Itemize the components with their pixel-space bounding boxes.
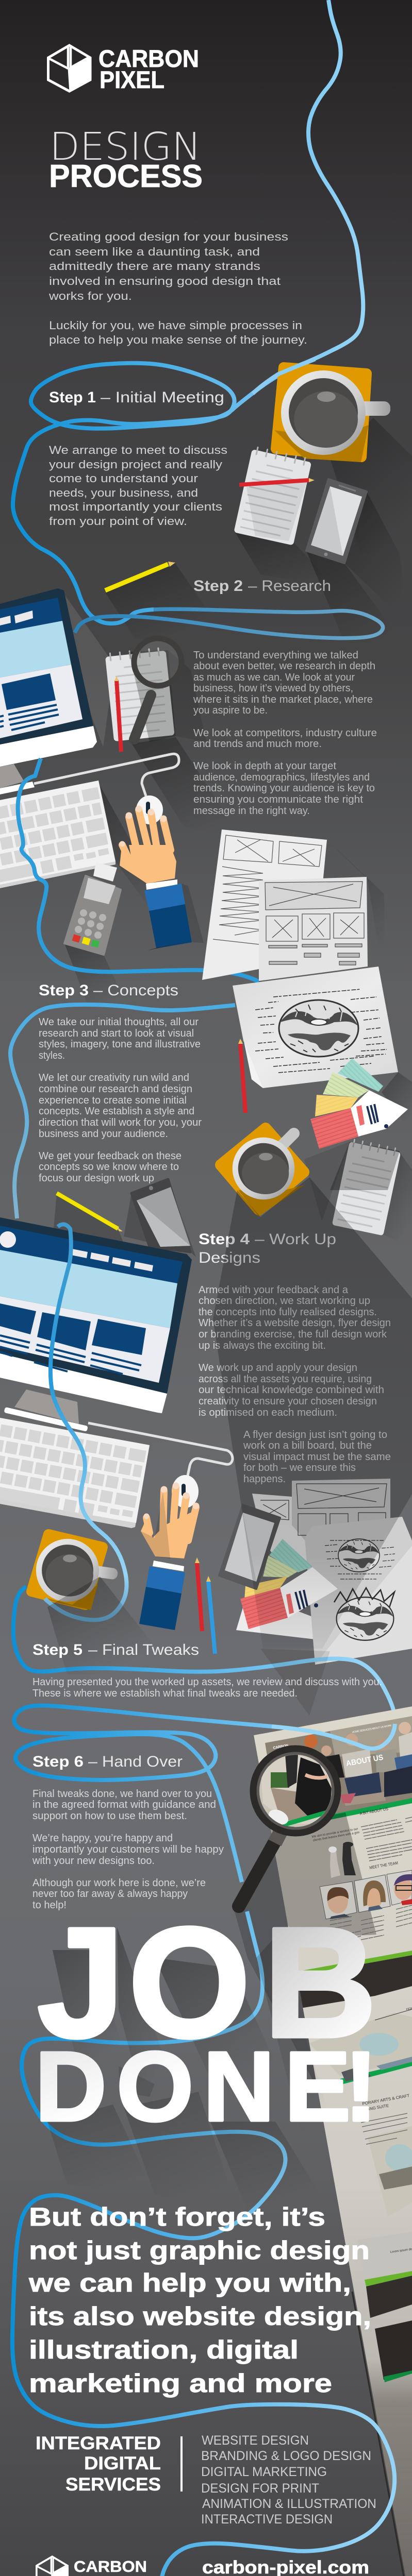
icon: wireframe sketch paper 2: [259, 877, 368, 981]
page edge shadow: [352, 2292, 407, 2576]
Step 6 heading: – Hand Over: [88, 1753, 183, 1770]
closing statement: marketing and more: [29, 2369, 332, 2398]
Step 2 text: business, how it’s viewed by others,: [193, 683, 353, 694]
Step 3 text: [39, 1016, 202, 1184]
icon: red pencil 2: [238, 1039, 245, 1113]
long shadows: first desk section: [52, 418, 412, 1257]
Step 4 text: work on a bill board, but the: [243, 1440, 372, 1451]
Step 1 heading: – Initial Meeting: [101, 389, 224, 406]
Step 2 text: you aspire to be.: [193, 705, 268, 716]
Step 5 text: These is where we establish what final tweaks are needed.: [32, 1688, 298, 1699]
Step 6 text: to help!: [32, 1900, 67, 1911]
services list: DESIGN FOR PRINT: [201, 2481, 319, 2496]
dog illustrations: [328, 1842, 356, 1878]
ribbon: down from magnifier, JOB and DONE loops to the footer: [12, 1911, 394, 2576]
title: [49, 125, 203, 194]
Step 3 heading: Step 3: [39, 982, 89, 999]
intro text: admittedly there are many strands: [49, 260, 260, 273]
Step 6 text: with your new designs too.: [32, 1855, 155, 1867]
icon: keyboard 2: [0, 1418, 150, 1528]
ribbon: through keyboard to paper: [18, 758, 259, 981]
intro text: works for you.: [48, 290, 132, 302]
Step 2 text: We look in depth at your target: [193, 760, 336, 772]
Step 1 text: most importantly your clients: [49, 500, 222, 513]
Step 1 heading: Step 1: [49, 389, 96, 406]
ribbon overlay on mockup: [272, 1724, 395, 1749]
about text lines: [330, 1817, 412, 1947]
icon: wireframe sketch paper 1: [202, 829, 327, 980]
icon: hand on mouse 2: [139, 1475, 199, 1630]
icon: keyboard 1: [0, 781, 116, 890]
Step 4 heading: – Work Up: [255, 1231, 336, 1248]
integrated digital services heading: INTEGRATED: [36, 2433, 161, 2453]
Step 4 text: up is always the exciting bit.: [199, 1340, 326, 1351]
shadow band below coaster 3: [47, 1577, 155, 1674]
Step 6 text: We’re happy, you’re happy and: [32, 1833, 173, 1844]
Step 3 text: direction that will work for you, your: [39, 1117, 202, 1128]
title: DESIGN: [50, 125, 201, 169]
integrated digital services heading: SERVICES: [65, 2475, 161, 2495]
Step 3 text: experience to create some initial: [39, 1095, 187, 1106]
shadow under website mockup: [234, 1845, 330, 2112]
closing statement: [28, 2202, 371, 2398]
intro text: [48, 230, 307, 346]
logo: Carbon Pixel: [48, 45, 199, 93]
intro text: can seem like a daunting task, and: [49, 245, 260, 258]
icon: coaster and coffee cup 2: [221, 1128, 304, 1216]
shaded content column: [270, 1812, 376, 1936]
icon: notepad 3: [330, 1139, 402, 1235]
vertical divider: [180, 2436, 183, 2492]
Step 2 text: about even better, we research in depth: [193, 660, 375, 672]
Step 4 text: [199, 1284, 391, 1485]
hero photo of the team: [265, 1716, 412, 1825]
Step 3 heading: – Concepts: [93, 982, 178, 999]
Step 4 text: is optimised on each medium.: [199, 1407, 337, 1418]
icon: notepad with magnifier and red pencil: [105, 638, 182, 752]
Step 3 text: concepts. We establish a style and: [39, 1106, 194, 1117]
Step 4 text: chosen direction, we start working up: [199, 1295, 370, 1307]
DONE headline: DONE!: [35, 2031, 377, 2142]
Step 3 text: styles.: [39, 1050, 65, 1061]
letter shadows for JOB DONE: [47, 1927, 330, 2210]
icon: hand on mouse 1: [120, 795, 201, 951]
integrated digital services heading: [36, 2433, 161, 2495]
ribbon: Step 5 and Step 6 loops: [13, 1587, 395, 1882]
services list: [201, 2433, 376, 2527]
Step 5 heading: – Final Tweaks: [88, 1641, 199, 1658]
icon: yellow pencil 1: [105, 562, 175, 590]
Step 2 text: as much as we can. We look at your: [193, 672, 355, 683]
Step 6 text: Final tweaks done, we hand over to you: [32, 1788, 212, 1800]
about text: We aim to provide a service to our: [311, 1827, 358, 1839]
Step 2 text: We look at competitors, industry culture: [193, 727, 377, 739]
closing statement: not just graphic design: [29, 2236, 370, 2265]
Step 2 text: and trends and much more.: [193, 738, 322, 750]
Step 4 text: visual impact must be the same: [243, 1451, 391, 1463]
footer logo: [37, 2556, 147, 2576]
Step 3 text: combine our research and design: [39, 1083, 192, 1095]
icon: coaster and coffee cup 3: [31, 1534, 119, 1610]
closing statement: illustration, digital: [29, 2335, 299, 2364]
ribbon over coaster: [253, 359, 315, 394]
Step 4 heading: Step 4: [199, 1231, 250, 1248]
icon: red and blue pencils: [195, 1557, 215, 1654]
Step 4 text: Armed with your feedback and a: [199, 1284, 349, 1296]
Step 3 text: concepts so we know where to: [39, 1161, 179, 1173]
title: PROCESS: [49, 159, 203, 194]
icon: phone 2: [131, 1179, 190, 1252]
Step 1 text: come to understand your: [49, 472, 199, 485]
Step 6 text: Although our work here is done, we’re: [32, 1877, 206, 1889]
about text: [311, 1806, 399, 1870]
JOB headline: JOB: [37, 1895, 377, 2070]
Step 2 heading: – Research: [248, 578, 331, 595]
page nav: HOME SERVICES ABOUT US WORK: [352, 1724, 392, 1734]
icon: paper stack with phone, swatches and donuts: [219, 1479, 412, 1665]
icon: mouse cable 1: [34, 754, 179, 796]
logo: Carbon Pixel: PIXEL: [100, 66, 164, 93]
Step 6 text: in the agreed format with guidance and: [32, 1799, 216, 1810]
closing statement: But don’t forget, it’s: [29, 2202, 325, 2231]
about text: clients that leaves them with a grin: [312, 1831, 360, 1842]
intro text: Luckily for you, we have simple processes in: [49, 319, 302, 332]
icon: colour swatch fan 1: [310, 1058, 408, 1149]
icon: card payment terminal: [64, 862, 121, 955]
icon: desktop monitor 2: [0, 1217, 192, 1432]
icon: donut sketch paper: [233, 967, 398, 1088]
Step 2 text: where it sits in the market place, where: [193, 694, 373, 705]
Step 5 heading: Step 5: [32, 1641, 83, 1658]
Step 4 text: Whether it’s a website design, flyer design: [199, 1317, 391, 1329]
Step 4 text: the concepts into fully realised designs.: [199, 1307, 377, 1318]
Step 3 text: styles, imagery, tone and illustrative: [39, 1039, 201, 1050]
Step 3 text: research and start to look at visual: [39, 1028, 194, 1039]
Step 2 text: ensuring you communicate the right: [193, 794, 363, 805]
Step 5 text: [32, 1676, 382, 1699]
shadow band continuing over Step 5: [260, 1649, 330, 1716]
Step 6 text: importantly your customers will be happy: [32, 1844, 224, 1855]
intro text: Creating good design for your business: [49, 230, 288, 243]
Step 6 text: support on how to use them best.: [32, 1810, 187, 1822]
icon: notepad with red pencil: [234, 446, 315, 546]
services list: BRANDING & LOGO DESIGN: [201, 2449, 371, 2463]
Step 4 heading: [199, 1231, 336, 1266]
body lines on the lower page: [361, 2113, 407, 2144]
Step 1 text: from your point of view.: [49, 515, 187, 528]
icon: yellow pencil 2: [57, 1193, 123, 1231]
ribbon: top and Step 1 loop: [13, 0, 363, 623]
Step 4 text: A flyer design just isn’t going to: [243, 1429, 387, 1440]
Step 5 text: Having presented you the worked up assets, we review and discuss with you.: [32, 1676, 382, 1688]
Step 4 text: across all the assets you require, using: [199, 1374, 372, 1385]
Step 4 text: We work up and apply your design: [199, 1362, 357, 1374]
green divider: [278, 1798, 412, 1830]
Step 4 text: for both – we ensure this: [243, 1462, 356, 1473]
page labels: ETING SUITE: [363, 2103, 389, 2112]
ribbon: Step 3 run: [10, 1005, 235, 1218]
page footer and next sections: [288, 1951, 412, 2382]
team portraits: [320, 1870, 412, 1919]
icon: phone 1: [306, 479, 367, 563]
icon: desktop monitor 1: [0, 588, 97, 794]
Step 3 text: business and your audience.: [39, 1128, 168, 1140]
services list: DIGITAL MARKETING: [201, 2465, 327, 2479]
ribbon: Step 2 loop: [75, 609, 383, 638]
Step 1 text: needs, your business, and: [49, 486, 198, 499]
page labels: PORARY ARTS & CRAFT: [362, 2093, 410, 2106]
Step 2 text: [193, 650, 377, 817]
Step 6 text: never too far away & always happy: [32, 1888, 188, 1900]
Step 1 text: your design project and really: [49, 458, 223, 471]
Step 4 heading: Designs: [199, 1249, 260, 1266]
Step 4 text: creativity to ensure your chosen design: [199, 1396, 377, 1407]
Step 3 text: We get your feedback on these: [39, 1150, 182, 1162]
Step 3 text: We take our initial thoughts, all our: [39, 1016, 199, 1028]
Step 3 text: focus our design work up: [39, 1173, 154, 1184]
Step 2 heading: Step 2: [193, 578, 243, 595]
footer logo: CARBON: [74, 2557, 147, 2575]
closing statement: we can help you with,: [28, 2268, 351, 2297]
about text: A BIT ABOUT US: [359, 1806, 388, 1816]
hero caption: ABOUT US: [345, 1753, 384, 1768]
page logo: CARBON: [273, 1744, 289, 1750]
Step 2 text: audience, demographics, lifestyles and: [193, 772, 370, 783]
services list: ANIMATION & ILLUSTRATION: [202, 2497, 376, 2511]
closing statement: its also website design,: [29, 2302, 371, 2331]
Step 4 text: happens.: [243, 1473, 286, 1485]
page labels: [362, 2007, 412, 2254]
Step 1 text: We arrange to meet to discuss: [49, 444, 227, 456]
logo: Carbon Pixel: CARBON: [98, 45, 199, 72]
Step 1 text: [49, 444, 227, 528]
intro text: involved in ensuring good design that: [49, 275, 281, 287]
Step 2 text: trends. Knowing your audience is key to: [193, 783, 375, 794]
long shadow band falling across Step 4: [213, 1177, 412, 1649]
about text: MEET THE TEAM: [369, 1860, 399, 1870]
Step 6 heading: Step 6: [32, 1753, 84, 1770]
Step 4 text: our technical knowledge combined with: [199, 1384, 384, 1396]
icon: mouse cable 2: [88, 1423, 233, 1481]
Step 2 text: To understand everything we talked: [193, 650, 358, 661]
integrated digital services heading: DIGITAL: [84, 2453, 161, 2473]
Step 3 text: We let our creativity run wild and: [39, 1072, 189, 1083]
Step 6 text: [32, 1788, 224, 1911]
ribbon: over second monitor and keyboard: [45, 1224, 127, 1620]
icon: coaster and coffee cup 1: [274, 367, 390, 462]
Step 4 text: or branding exercise, the full design work: [199, 1329, 387, 1340]
Step 2 text: message in the right way.: [193, 805, 310, 817]
website mockup page: [254, 1706, 412, 2576]
icon: magnifying glass over the website: [239, 1749, 340, 1906]
intro text: place to help you make sense of the journey.: [49, 333, 307, 346]
services list: INTERACTIVE DESIGN: [201, 2512, 333, 2527]
services list: WEBSITE DESIGN: [202, 2433, 309, 2448]
